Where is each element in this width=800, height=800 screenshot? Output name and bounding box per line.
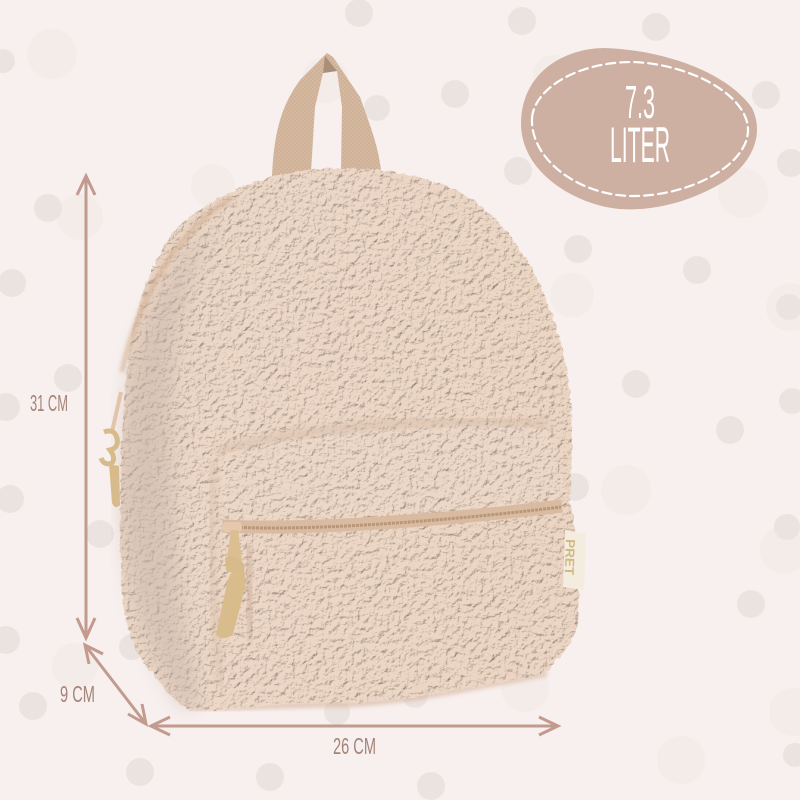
depth arrow [85, 645, 146, 724]
height label: 31 CM [30, 390, 68, 416]
capacity badge [521, 48, 757, 209]
side panel and front body [120, 168, 579, 710]
front zipper pull [216, 522, 246, 638]
pocket top shadow [216, 421, 548, 452]
height arrow [77, 176, 95, 638]
ground shadow [190, 673, 547, 708]
side label tag [562, 530, 586, 590]
blob background [521, 48, 757, 209]
capacity badge: LITER [610, 117, 670, 173]
tag text: PRET [562, 539, 578, 575]
zipper teeth [232, 507, 561, 528]
front pocket [211, 421, 563, 688]
width arrow [151, 717, 558, 735]
pocket fold [214, 428, 563, 518]
carry handle [272, 53, 381, 176]
zipper tape [222, 506, 562, 527]
width label: 26 CM [333, 733, 376, 759]
pocket left edge shadow [211, 460, 222, 688]
stitched border [532, 62, 748, 196]
capacity badge: 7.3 [625, 76, 655, 128]
side zipper pull [101, 392, 121, 507]
top zipper seam [122, 198, 232, 372]
pocket fold right of pull [247, 545, 252, 640]
front pocket zipper [222, 506, 562, 528]
backpack [101, 53, 586, 710]
side panel shading [121, 225, 215, 709]
depth label: 9 CM [60, 681, 95, 707]
